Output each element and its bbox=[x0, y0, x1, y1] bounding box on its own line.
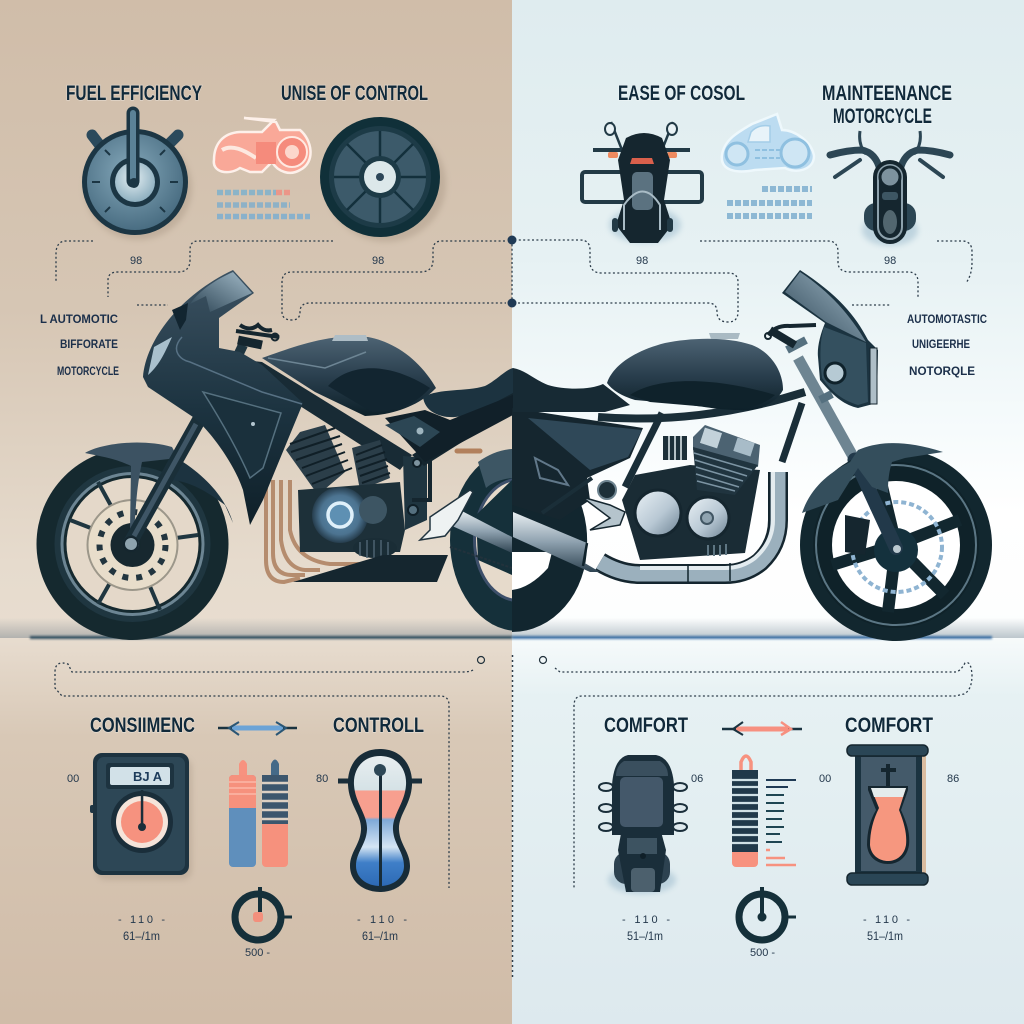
front fender right bbox=[802, 443, 943, 513]
small numeric labels bbox=[67, 773, 959, 959]
heading: controll: CONTROLL bbox=[333, 714, 424, 737]
chart: ribbed tube with scale bbox=[732, 756, 796, 867]
text block: left labels: BIFFORATE bbox=[60, 337, 118, 351]
front fork bbox=[124, 418, 200, 551]
engine right bbox=[598, 425, 760, 560]
small scale captions: - 110 - bbox=[622, 914, 670, 926]
connector lines bottom bbox=[55, 655, 972, 980]
small scale captions: 51–/1m bbox=[867, 929, 903, 943]
text block: right labels: UNIGEERHE bbox=[912, 337, 970, 351]
connector lines top bbox=[56, 236, 972, 322]
handlebar cluster right bbox=[765, 325, 816, 345]
ground shadow bbox=[0, 618, 1024, 639]
icon: control gauge bbox=[338, 749, 422, 892]
rear fender and panel right bbox=[512, 408, 643, 520]
icon: handlebars bbox=[830, 131, 950, 246]
heading: consumption: CONSIIMENC bbox=[90, 714, 195, 737]
text block: right labels: NOTORQLE bbox=[909, 364, 975, 378]
small scale captions bbox=[118, 914, 910, 943]
illustration: left sport motorcycle bbox=[36, 270, 513, 640]
front fender bbox=[85, 443, 178, 530]
main frame bbox=[225, 358, 513, 530]
text block: right labels bbox=[907, 312, 987, 378]
panel: right background bbox=[512, 0, 1024, 1024]
heading: comfort one: COMFORT bbox=[604, 714, 688, 737]
small scale captions: - 110 - bbox=[863, 914, 910, 926]
icon: double arrow red bbox=[722, 722, 802, 735]
chart: twin tubes bbox=[229, 760, 288, 867]
icon: fuel jar bbox=[847, 745, 928, 885]
silencer left bbox=[450, 510, 512, 553]
icon: fuel dial bbox=[82, 113, 192, 240]
fork lower over wheel bbox=[860, 470, 901, 553]
rear fender bbox=[172, 462, 233, 523]
white foot peg bbox=[420, 490, 473, 540]
fuel tank right bbox=[607, 333, 783, 410]
copper exhaust bbox=[266, 480, 360, 582]
frame right bbox=[542, 392, 805, 513]
front wheel right bbox=[800, 449, 992, 641]
small scale captions: - 110 - bbox=[357, 914, 407, 926]
small numeric labels: 00 bbox=[67, 773, 79, 785]
icon: motorcycle rear view bbox=[582, 122, 702, 243]
icon: red motorcycle bbox=[214, 118, 311, 173]
headlight fairing bbox=[782, 270, 878, 408]
heading: ease of cosol: EASE OF COSOL bbox=[618, 82, 745, 105]
small scale captions: 61–/1m bbox=[123, 929, 160, 943]
text block: right labels: AUTOMOTASTIC bbox=[907, 312, 987, 326]
icon: right stopwatch bbox=[739, 887, 796, 940]
small scale captions: 61–/1m bbox=[362, 929, 398, 943]
handlebar cluster bbox=[232, 325, 279, 368]
engine bbox=[286, 425, 421, 558]
fairing bbox=[143, 270, 303, 525]
icon: double arrow blue bbox=[218, 722, 297, 735]
text block: left labels: L AUTOMOTIC bbox=[40, 312, 118, 326]
icon: blue motorcycle bbox=[722, 114, 814, 171]
text block: left labels: MOTORCYCLE bbox=[57, 364, 119, 378]
belly pan bbox=[293, 555, 448, 582]
seat bbox=[423, 368, 513, 417]
small numeric labels: 86 bbox=[947, 773, 959, 785]
front wheel bbox=[36, 448, 228, 640]
connector lines top: 98 bbox=[372, 255, 384, 267]
small numeric labels: 500 - bbox=[245, 947, 270, 959]
foot peg right bbox=[582, 497, 625, 530]
icon: gauge box bbox=[90, 753, 192, 880]
small numeric labels: 00 bbox=[819, 773, 831, 785]
heading: fuel efficiency: FUEL EFFICIENCY bbox=[66, 82, 202, 105]
rear wheel right bbox=[512, 450, 587, 632]
connector lines top: 98 bbox=[130, 255, 142, 267]
small numeric labels: 06 bbox=[691, 773, 703, 785]
chart: right dashed bars bbox=[727, 189, 812, 216]
illustration: right cruiser motorcycle bbox=[512, 270, 992, 641]
heading: maintenance motorcycle bbox=[822, 82, 952, 128]
icon: gauge box: BJ A bbox=[133, 769, 163, 784]
heading: unise of control: UNISE OF CONTROL bbox=[281, 82, 428, 105]
heading: maintenance motorcycle: MAINTEENANCE bbox=[822, 82, 952, 105]
chart: left dashed bars bbox=[217, 192, 310, 216]
seat right bbox=[513, 368, 630, 412]
text block: left labels bbox=[40, 312, 119, 378]
small scale captions: 51–/1m bbox=[627, 929, 663, 943]
heading: comfort two: COMFORT bbox=[845, 714, 933, 737]
chain bbox=[450, 547, 512, 568]
exhaust right bbox=[513, 472, 778, 582]
rear wheel left bbox=[450, 449, 512, 631]
small numeric labels: 500 - bbox=[750, 947, 775, 959]
icon: motorcycle seat top view bbox=[599, 755, 687, 894]
small brown tube bbox=[457, 448, 480, 454]
front fork right bbox=[787, 340, 897, 548]
heading: maintenance motorcycle: MOTORCYCLE bbox=[833, 105, 932, 128]
icon: left stopwatch bbox=[235, 887, 292, 940]
connector lines top: 98 bbox=[636, 255, 648, 267]
connector lines top: 98 bbox=[884, 255, 896, 267]
panel: left background bbox=[0, 0, 512, 1024]
small side vent bbox=[385, 416, 440, 447]
small scale captions: - 110 - bbox=[118, 914, 165, 926]
under seat dark panel bbox=[385, 395, 513, 462]
fuel tank bbox=[262, 335, 436, 416]
small numeric labels: 80 bbox=[316, 773, 328, 785]
icon: wheel bbox=[320, 117, 446, 242]
